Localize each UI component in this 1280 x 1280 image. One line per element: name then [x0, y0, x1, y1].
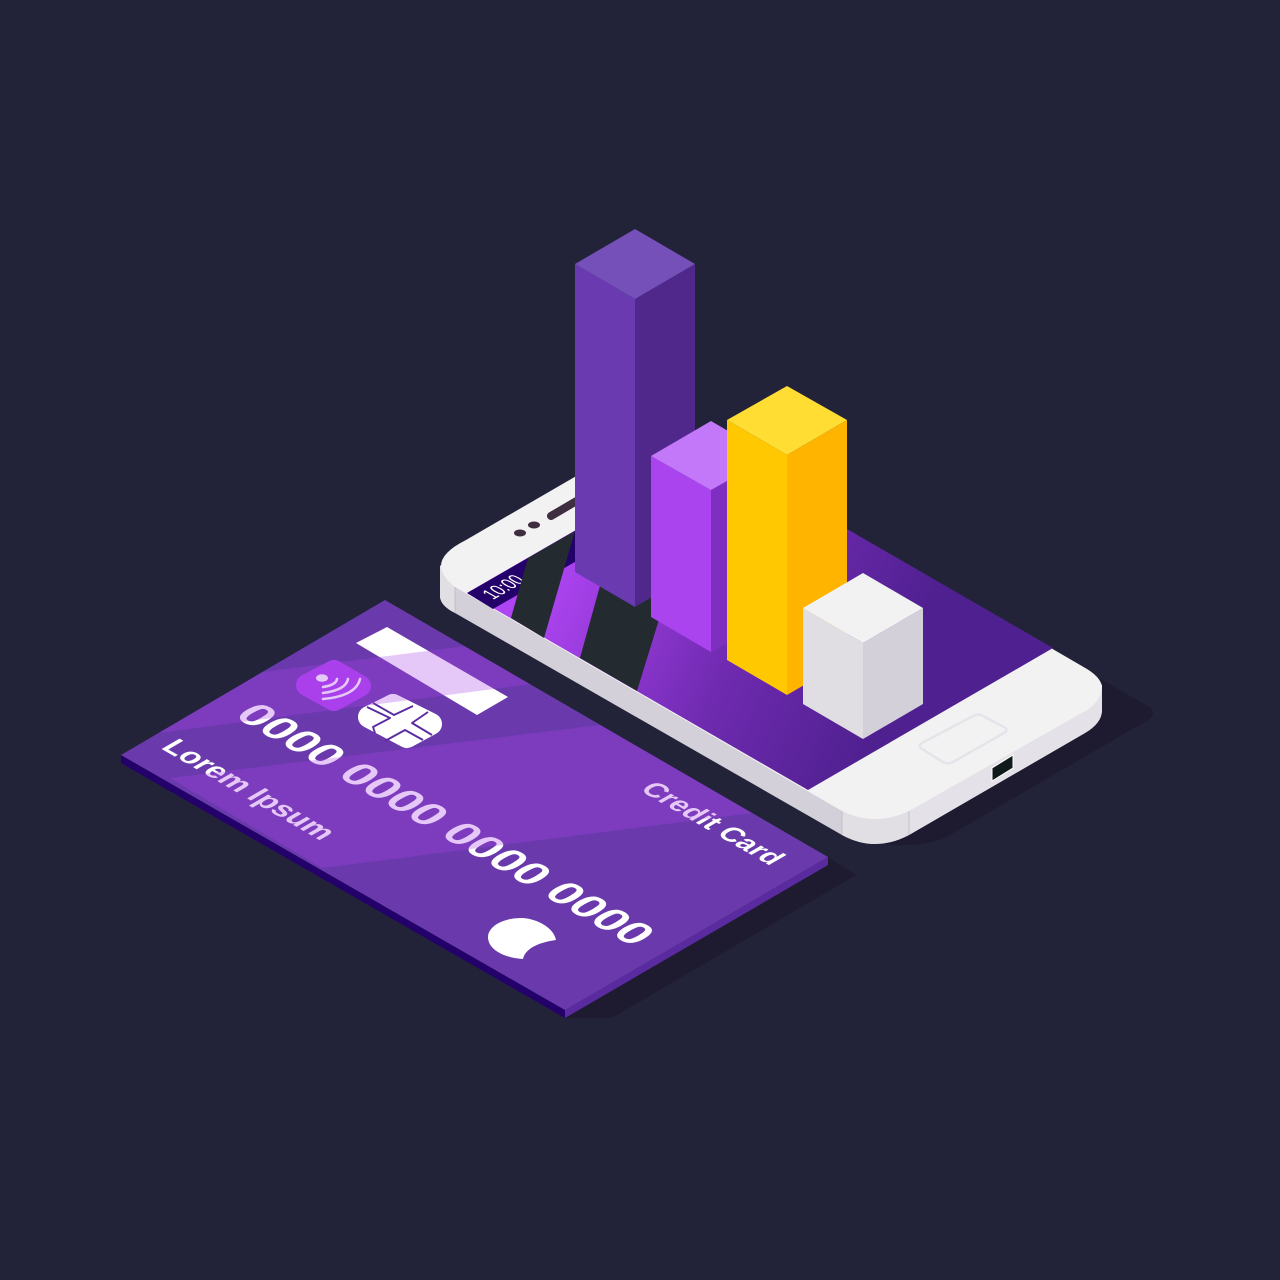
moon logo [488, 918, 556, 959]
chip [367, 703, 432, 741]
yellow bar [727, 386, 847, 695]
medium purple bar [651, 421, 771, 652]
dark stripe 1 [511, 531, 575, 638]
sensor dot [528, 522, 540, 528]
bar chart [575, 229, 923, 739]
phone top surface [441, 424, 1102, 819]
phone right side [909, 690, 1102, 835]
dark stripe 2 [580, 575, 665, 691]
camera dot [514, 530, 526, 536]
phone [440, 424, 1102, 844]
light band overlays [120, 646, 752, 868]
charging port [992, 755, 1013, 781]
phone shadow [860, 676, 1153, 845]
contactless icon [307, 671, 360, 700]
white bar [803, 573, 923, 739]
phone body side [440, 565, 1102, 844]
card number: 0000 0000 0000 0000 [224, 697, 666, 952]
card right edge [565, 857, 828, 1018]
phone bottom corner [842, 805, 909, 844]
tall violet bar [575, 229, 695, 607]
home button [920, 714, 1006, 764]
signature strip [356, 627, 508, 715]
card face [121, 600, 828, 1010]
side seams [455, 587, 909, 835]
status bar [467, 528, 580, 609]
speaker [551, 499, 580, 516]
card label: Credit Card [634, 777, 792, 869]
credit card [120, 600, 828, 1018]
card left edge [121, 755, 565, 1018]
time: 10:00 [477, 572, 530, 603]
phone left corner [440, 565, 455, 613]
screen [467, 451, 1053, 790]
cardholder name: Lorem Ipsum [154, 735, 344, 845]
isometric illustration [121, 229, 1152, 1018]
card shadow [565, 857, 856, 1018]
